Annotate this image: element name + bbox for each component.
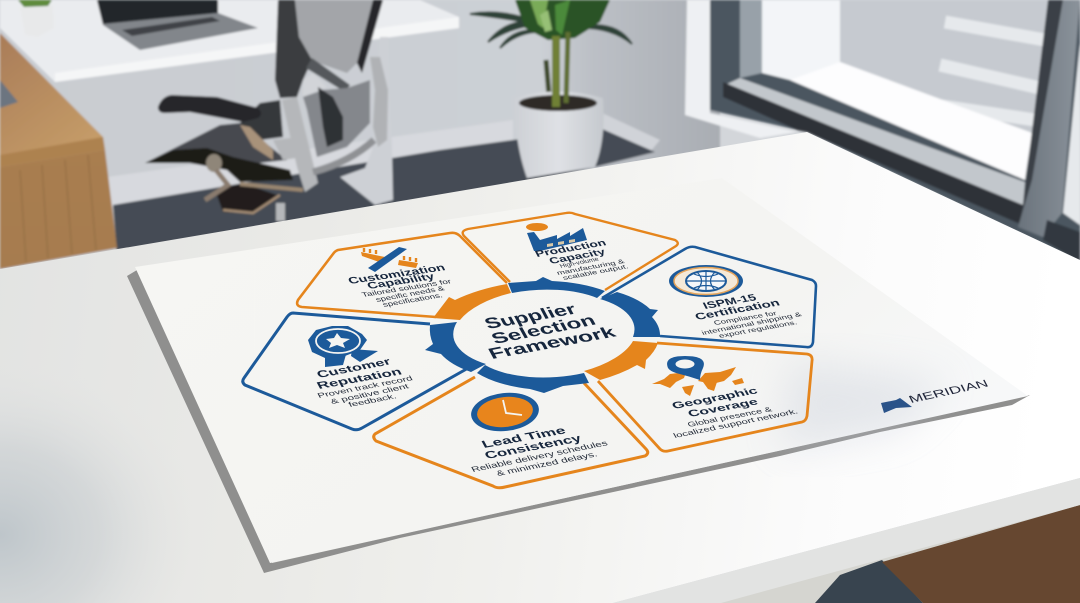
panel: ISPM-15 certification: international shipping & <box>701 311 804 337</box>
panel: production capacity <box>463 213 678 290</box>
panel: ISPM-15 certification: export regulations. <box>718 319 799 340</box>
panel: customization capability: specifications. <box>382 292 444 309</box>
panel: lead time consistency: Consistency <box>483 433 584 462</box>
panel: customization capability: Tailored solutions for <box>361 278 454 299</box>
ring segment blue left <box>425 322 486 372</box>
central title <box>482 301 619 363</box>
back wall <box>0 0 720 280</box>
icon: crossed rulers <box>361 247 418 272</box>
office chair <box>145 0 388 221</box>
panel: production capacity: scalable output. <box>562 263 630 282</box>
wood cabinet <box>0 33 117 269</box>
paper shadow <box>127 270 1030 573</box>
brand logo: Meridian: MERIDIAN <box>907 378 991 406</box>
panel: geographic coverage: Geographic <box>670 386 761 412</box>
infographic poster sheet <box>135 178 1028 563</box>
ring segment orange right <box>584 341 658 380</box>
panel: customization capability: specific needs & <box>375 285 447 304</box>
ring segment blue bottom <box>477 365 589 393</box>
panel: geographic coverage: localized support network. <box>672 408 800 440</box>
central title: Framework <box>486 324 619 363</box>
panel: lead time consistency: & minimized delays. <box>494 450 599 478</box>
panel: lead time consistency: Lead Time <box>480 425 568 451</box>
panel: ISPM-15 certification: ISPM-15 <box>701 293 759 312</box>
back desk <box>0 0 459 82</box>
panel: customization capability <box>297 233 507 317</box>
panel: production capacity: Production <box>533 238 608 259</box>
desk leg <box>340 37 393 205</box>
ring segment blue top <box>508 277 605 298</box>
paper <box>135 178 1028 563</box>
panel: customer reputation: Proven track record <box>316 375 414 400</box>
floor <box>113 128 655 255</box>
ring segment orange upper left <box>433 284 511 320</box>
icon: clock <box>469 390 541 434</box>
small potted plant <box>18 0 54 37</box>
panel: customer reputation: Reputation <box>315 367 404 392</box>
baseboard <box>100 120 513 207</box>
panel: geographic coverage: Global presence & <box>686 406 774 429</box>
panel: lead time consistency <box>374 377 648 488</box>
window <box>685 0 1080 262</box>
central title: Supplier <box>482 301 580 333</box>
panel: ISPM-15 certification <box>602 247 816 347</box>
lower floor and wood panel <box>700 500 1080 603</box>
brand logo: Meridian <box>881 378 991 413</box>
panel: customer reputation: & positive client <box>329 383 410 406</box>
central gear ring <box>425 277 660 393</box>
central title: Selection <box>489 313 599 348</box>
panel: geographic coverage: Coverage <box>686 397 761 420</box>
icon: award ribbon badge <box>308 326 378 367</box>
icon: factory <box>526 223 587 251</box>
panel: customization capability: Customization <box>346 263 447 287</box>
panel: production capacity: Capacity <box>547 247 608 266</box>
ring segment blue right <box>600 292 660 337</box>
back desk front edge <box>55 17 459 82</box>
panel: lead time consistency: Reliable delivery schedules <box>469 439 610 474</box>
panel: geographic coverage <box>598 343 812 451</box>
panel: ISPM-15 certification: Compliance for <box>713 310 779 327</box>
potted plant <box>470 0 632 178</box>
panel: customer reputation <box>243 313 470 430</box>
panel: ISPM-15 certification: Certification <box>693 298 782 323</box>
icon: location pin and world map <box>652 356 744 396</box>
laptop <box>97 0 258 50</box>
panel: customization capability: Capability <box>365 272 437 292</box>
icon: certification seal <box>669 265 743 297</box>
right baseboard <box>600 112 660 152</box>
background: office scene <box>0 0 1080 280</box>
panel: customer reputation: feedback. <box>347 393 398 409</box>
panel: production capacity: manufacturing & <box>556 258 626 277</box>
white desk <box>0 132 1080 603</box>
paper shading <box>780 360 950 450</box>
panel: production capacity: High-volume <box>559 256 601 270</box>
panel: customer reputation: Customer <box>315 357 393 381</box>
